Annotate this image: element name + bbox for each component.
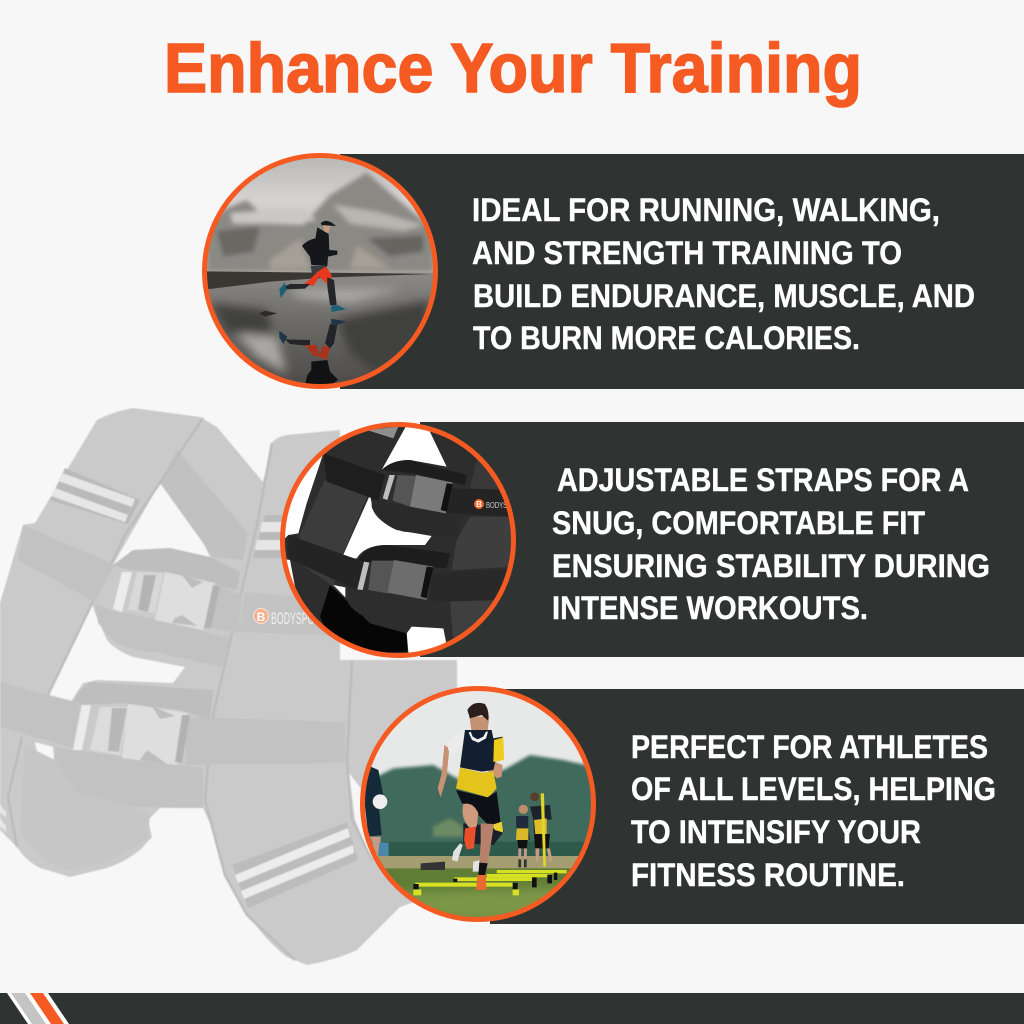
shoulder reflective stripes xyxy=(50,468,140,524)
orange ring xyxy=(204,156,436,386)
runner xyxy=(279,221,346,312)
closeup upper strap xyxy=(323,453,385,501)
photo circle: adjustable straps closeup xyxy=(280,420,520,663)
panel text: ENSURING STABILITY DURING xyxy=(552,548,990,584)
shoulder strap shading xyxy=(160,450,248,560)
panel band by logo xyxy=(238,592,340,636)
panel text: AND STRENGTH TRAINING TO xyxy=(472,235,902,271)
vest logo: BODYSPORT xyxy=(271,609,326,628)
panel: athletes xyxy=(490,689,1024,924)
panel text: TO BURN MORE CALORIES. xyxy=(473,320,860,356)
centre reflective stripes xyxy=(253,515,290,558)
closeup black lower flap xyxy=(320,585,407,653)
footer stripes xyxy=(7,993,69,1024)
vest logo: B xyxy=(257,610,266,624)
title: Enhance Your Training xyxy=(164,29,862,107)
panel: straps xyxy=(420,422,1024,657)
panel text: TO INTENSIFY YOUR xyxy=(631,814,921,850)
blue chair xyxy=(378,843,389,856)
opening: between shoulder straps xyxy=(113,483,210,565)
upper strap xyxy=(18,525,115,602)
panel background xyxy=(340,154,1024,389)
closeup upper buckle xyxy=(383,475,453,513)
opening: between buckles xyxy=(48,603,185,703)
panel: running xyxy=(340,154,1024,389)
equipment bag xyxy=(421,862,445,870)
lower strap xyxy=(0,682,80,748)
panel text: BUILD ENDURANCE, MUSCLE, AND xyxy=(473,278,975,314)
lower reflective stripes xyxy=(232,822,358,908)
vest logo xyxy=(254,608,326,628)
closeup lower buckle xyxy=(357,560,433,600)
panel text xyxy=(552,462,990,626)
panel text: INTENSE WORKOUTS. xyxy=(552,590,868,626)
runner reflection xyxy=(279,319,347,385)
photo circle: athlete training drill xyxy=(360,687,600,928)
opening: lower small gap xyxy=(35,742,54,762)
closeup logo xyxy=(474,499,506,509)
closeup logo: B xyxy=(476,500,482,509)
strap seam lines xyxy=(8,418,372,960)
opening: sliver beside panel xyxy=(349,773,378,860)
background players xyxy=(452,792,553,872)
panel text: FITNESS ROUTINE. xyxy=(631,857,905,893)
panel text xyxy=(472,192,975,356)
panel text: IDEAL FOR RUNNING, WALKING, xyxy=(472,192,940,228)
footer bar xyxy=(0,993,1024,1024)
lower pads xyxy=(73,682,213,720)
upper pads xyxy=(113,548,240,590)
closeup lower pad xyxy=(358,545,450,568)
bystander with ball xyxy=(365,767,387,855)
lower flap shading xyxy=(20,745,150,871)
panel background xyxy=(490,689,1024,924)
panel text: PERFECT FOR ATHLETES xyxy=(631,729,988,765)
closeup lower strap xyxy=(288,535,363,590)
main athlete xyxy=(438,703,504,890)
orange ring xyxy=(362,688,594,920)
panel text: ADJUSTABLE STRAPS FOR A xyxy=(557,462,969,498)
photo circle: runner on beach xyxy=(200,150,440,389)
panel text: SNUG, COMFORTABLE FIT xyxy=(552,505,925,541)
upper buckle xyxy=(113,572,220,630)
panel text xyxy=(631,729,996,893)
hurdles xyxy=(413,870,567,895)
background vest image (faded) xyxy=(0,408,457,965)
closeup vest body xyxy=(285,427,420,653)
orange ring xyxy=(282,424,514,656)
closeup logo: BODYSPO xyxy=(486,500,516,510)
left edge stripes xyxy=(0,805,6,832)
closeup background gaps xyxy=(382,425,447,470)
lower buckle xyxy=(73,704,190,765)
panel background xyxy=(420,422,1024,657)
closeup upper pad xyxy=(382,460,467,485)
